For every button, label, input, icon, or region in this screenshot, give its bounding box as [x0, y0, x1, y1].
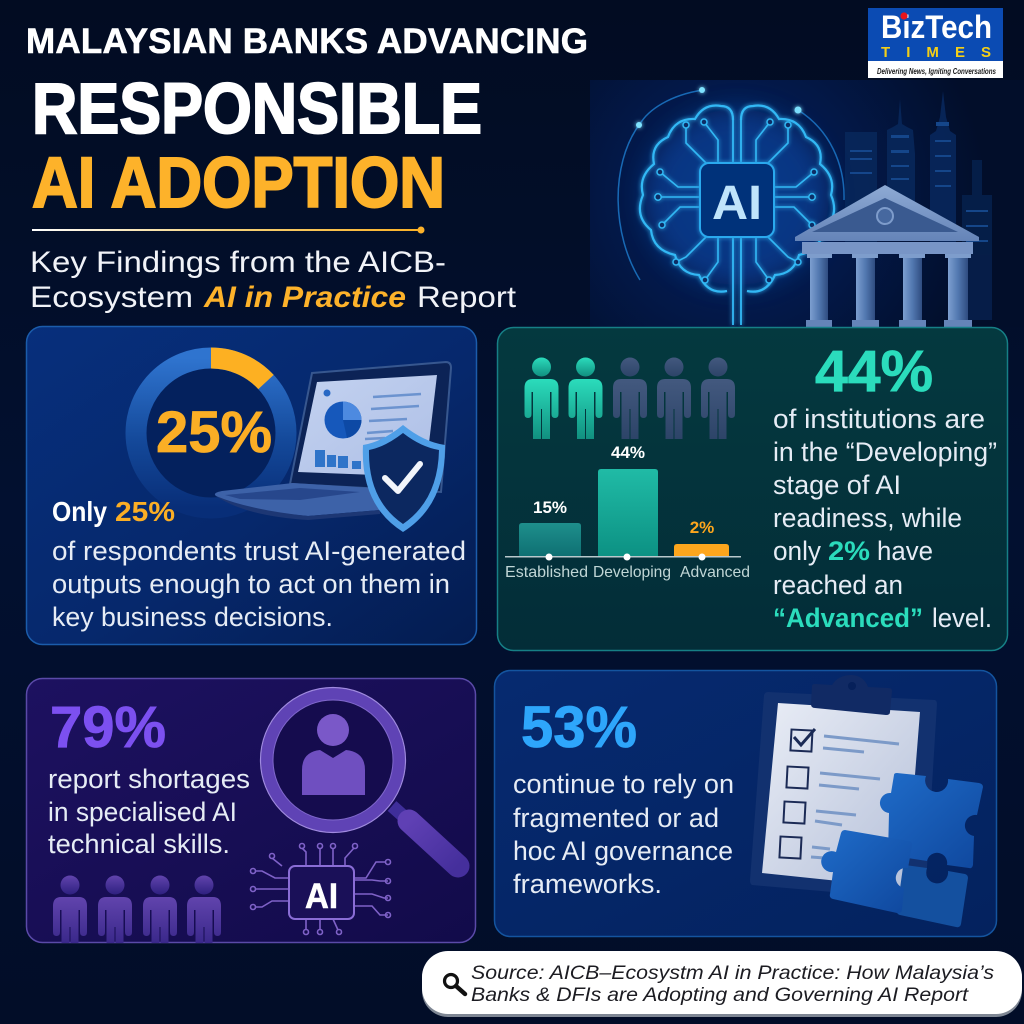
description text — [773, 404, 997, 633]
description text: only — [773, 536, 821, 566]
stat: 44%: 44% — [815, 339, 933, 404]
description text: reached an — [773, 570, 903, 600]
description text: level. — [932, 603, 992, 633]
city skyline — [845, 91, 992, 320]
icon: AI circuit chip — [250, 844, 390, 934]
description text: report shortages — [48, 764, 250, 794]
source text: Source: AICB–Ecosystm AI in Practice: How Malaysia’s — [471, 963, 995, 984]
hero backdrop — [590, 80, 966, 327]
bank building — [795, 185, 979, 327]
description text: key business decisions. — [52, 602, 333, 632]
description text: continue to rely on — [513, 769, 734, 799]
title line: Responsible: RESPONSIBLE — [32, 70, 482, 149]
subtitle: Key Findings from the AICB- — [30, 246, 446, 279]
logo: BizTech Times — [868, 8, 1003, 78]
orbit nodes — [636, 87, 802, 128]
bar chart: readiness stages: Established — [505, 564, 588, 581]
description text: hoc AI governance — [513, 836, 733, 866]
title line: Malaysian Banks Advancing: MALAYSIAN BANKS ADVANCING — [26, 22, 588, 61]
description text: have — [877, 536, 933, 566]
bar chart: readiness stages: 15% — [533, 498, 567, 517]
description text — [48, 764, 250, 859]
text: only 25% — [52, 496, 175, 527]
brain glow halo — [645, 109, 829, 285]
donut chart 25% — [136, 358, 286, 508]
description text: of institutions are — [773, 404, 985, 434]
AI chip tile — [700, 163, 774, 237]
description text: 2% — [828, 536, 870, 566]
logo: BizTech Times: TIMES — [881, 44, 991, 61]
icon: puzzle pieces — [821, 773, 983, 927]
description text: in specialised AI — [48, 797, 237, 827]
icon row: five people — [524, 358, 735, 439]
stat: 53%: 53% — [521, 695, 637, 760]
stat: 79%: 79% — [50, 695, 166, 760]
subtitle: Ecosystem — [30, 281, 193, 314]
donut chart 25%: 25% — [156, 400, 272, 465]
icon: search — [444, 974, 465, 994]
description text: fragmented or ad — [513, 803, 719, 833]
source text — [471, 963, 995, 1006]
icon row: four people — [53, 876, 221, 943]
panel: 53% governance — [494, 670, 996, 936]
title block — [26, 22, 588, 223]
text: only 25%: Only — [52, 496, 107, 527]
description text: technical skills. — [48, 829, 230, 859]
description text: “Advanced” — [773, 603, 923, 633]
panel: 79% skills shortage — [26, 678, 476, 957]
title line: AI Adoption: AI ADOPTION — [32, 144, 445, 223]
description text — [513, 769, 734, 899]
icon: magnifying glass over person — [260, 688, 458, 866]
hero illustration: AI brain, skyline and bank — [590, 80, 1024, 327]
subtitle — [30, 246, 517, 314]
source text: Banks & DFIs are Adopting and Governing AI Report — [471, 985, 969, 1006]
bar chart: readiness stages: Developing — [593, 564, 671, 581]
glowing brain — [640, 106, 834, 325]
AI chip tile: AI — [712, 177, 762, 230]
description text: in the “Developing” — [773, 437, 997, 467]
text: only 25%: 25% — [115, 496, 175, 527]
bar chart: readiness stages: 44% — [611, 443, 645, 462]
panel: 25% trust — [26, 326, 476, 644]
icon: clipboard checklist — [750, 675, 937, 900]
description text: readiness, while — [773, 503, 962, 533]
bar chart: readiness stages: Advanced — [680, 564, 750, 581]
panel: 44% readiness — [498, 328, 1008, 650]
description text: stage of AI — [773, 470, 901, 500]
subtitle: Report — [417, 281, 517, 314]
icon: shield with check — [363, 425, 445, 532]
orbit arcs around brain — [618, 90, 844, 280]
description text: outputs enough to act on them in — [52, 569, 450, 599]
description text: frameworks. — [513, 869, 662, 899]
source pill — [422, 951, 1022, 1017]
bar chart: readiness stages: 2% — [690, 518, 714, 537]
gold divider with dot — [32, 226, 424, 234]
icon: laptop with dashboard — [215, 362, 451, 520]
logo: BizTech Times: BizTech — [881, 9, 992, 45]
subtitle: AI in Practice — [203, 281, 406, 314]
icon: AI circuit chip: AI — [305, 877, 338, 916]
description text: of respondents trust AI-generated — [52, 536, 466, 566]
description text — [52, 536, 466, 632]
bar chart: readiness stages — [505, 443, 750, 581]
